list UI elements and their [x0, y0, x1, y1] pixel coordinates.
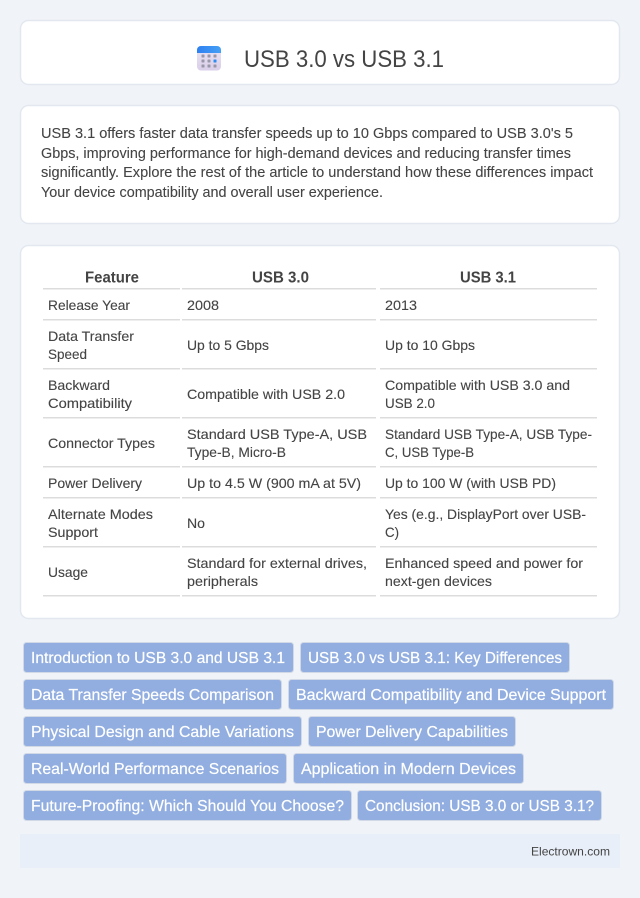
tag list [24, 642, 614, 820]
tag: Application in Modern Devices [301, 761, 516, 778]
row: data transfer speed: Data Transfer [48, 328, 134, 344]
tag: Backward Compatibility and Device Support [296, 687, 607, 704]
tag [358, 790, 602, 820]
intro paragraph [41, 126, 593, 201]
table header: USB 3.0 [252, 270, 309, 286]
intro paragraph: Your device compatibility and overall user experience. [41, 185, 383, 201]
table header [85, 270, 516, 286]
row: power delivery: Power Delivery [48, 475, 142, 491]
row: backward compatibility: Compatibility [48, 395, 132, 411]
row: connector types: Connector Types [48, 435, 155, 451]
tag: Introduction to USB 3.0 and USB 3.1 [31, 650, 285, 667]
panel: title [20, 20, 620, 84]
table header: USB 3.1 [460, 270, 516, 286]
tag: Physical Design and Cable Variations [31, 724, 294, 741]
row: alternate modes support: No [187, 515, 205, 531]
panel: comparison table [20, 246, 620, 618]
row: connector types: C, USB Type-B [385, 444, 474, 460]
row: alternate modes support: Support [48, 524, 98, 540]
tag [300, 642, 570, 672]
row: data transfer speed: Speed [48, 346, 87, 362]
tag [24, 642, 294, 672]
intro paragraph: Gbps, improving performance for high-demand devices and reducing transfer times [41, 146, 571, 162]
tag [308, 716, 516, 746]
row: connector types: Type-B, Micro-B [187, 444, 286, 460]
row: backward compatibility: Backward [48, 377, 110, 393]
tag [24, 716, 302, 746]
row: alternate modes support: Yes (e.g., DisplayPort over USB- [385, 506, 586, 522]
footer [20, 834, 620, 868]
row: alternate modes support [48, 506, 586, 540]
row: backward compatibility: Compatible with USB 3.0 and [385, 377, 570, 393]
tag: Data Transfer Speeds Comparison [31, 687, 274, 704]
tag [294, 754, 524, 784]
intro paragraph: significantly. Explore the rest of the article to understand how these differences impact [41, 165, 593, 181]
row: release year: 2008 [187, 297, 219, 313]
tag [288, 680, 614, 710]
row: data transfer speed: Up to 5 Gbps [187, 337, 269, 353]
tag: Future-Proofing: Which Should You Choose? [31, 798, 344, 815]
row: usage: Usage [48, 564, 88, 580]
footer credit: Electrown.com [531, 844, 610, 858]
row: usage: peripherals [187, 573, 258, 589]
row: alternate modes support: Alternate Modes [48, 506, 153, 522]
title text: USB 3.0 vs USB 3.1 [244, 46, 444, 73]
row: power delivery [48, 475, 556, 491]
tag: Conclusion: USB 3.0 or USB 3.1? [365, 798, 594, 815]
row: data transfer speed [48, 328, 475, 362]
row: release year: 2013 [385, 297, 417, 313]
tag: Real-World Performance Scenarios [31, 761, 279, 778]
intro paragraph: USB 3.1 offers faster data transfer speeds up to 10 Gbps compared to USB 3.0's 5 [41, 126, 573, 142]
row: connector types: Standard USB Type-A, USB [187, 426, 367, 442]
tag: Power Delivery Capabilities [316, 724, 508, 741]
row: backward compatibility: Compatible with USB 2.0 [187, 386, 345, 402]
row: connector types [48, 426, 592, 460]
row: data transfer speed: Up to 10 Gbps [385, 337, 475, 353]
panel: introduction [20, 106, 620, 224]
icon: calendar [197, 46, 221, 70]
row: power delivery: Up to 100 W (with USB PD) [385, 475, 556, 491]
row: usage: Enhanced speed and power for [385, 555, 583, 571]
tag [24, 680, 282, 710]
tag [24, 754, 286, 784]
row: release year [48, 297, 417, 313]
row: power delivery: Up to 4.5 W (900 mA at 5V) [187, 475, 361, 491]
tag [24, 790, 352, 820]
table header: Feature [85, 270, 139, 286]
row: usage: next-gen devices [385, 573, 492, 589]
row: alternate modes support: C) [385, 524, 399, 540]
row: release year: Release Year [48, 297, 130, 313]
row: connector types: Standard USB Type-A, USB Type- [385, 426, 592, 442]
row: backward compatibility [48, 377, 570, 411]
row: usage: Standard for external drives, [187, 555, 367, 571]
row: usage [48, 555, 583, 589]
row: backward compatibility: USB 2.0 [385, 395, 435, 411]
tag: USB 3.0 vs USB 3.1: Key Differences [308, 650, 562, 667]
